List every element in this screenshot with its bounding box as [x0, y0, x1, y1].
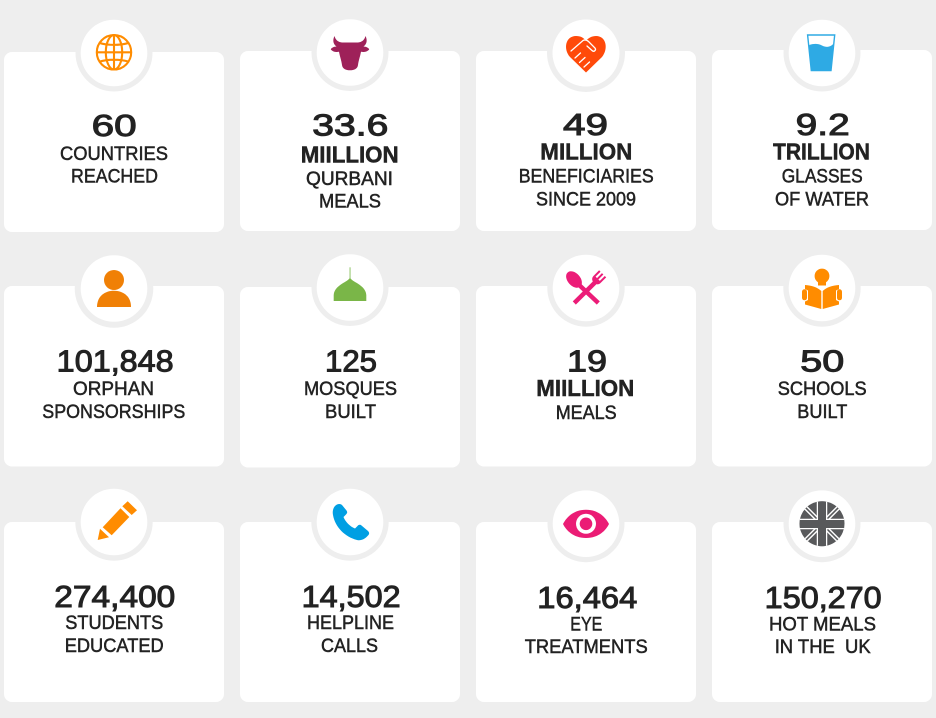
value: 50 [800, 345, 844, 379]
label [306, 168, 393, 212]
label [60, 143, 168, 188]
card background [476, 286, 696, 466]
value: 101,848 [57, 345, 174, 379]
icon badge [311, 483, 389, 561]
value: 14,502 [302, 580, 401, 614]
value: 33.6 [312, 108, 388, 142]
icon badge [547, 249, 625, 327]
label: BUILT [325, 401, 376, 423]
panel: 16,464 eye treatments [476, 485, 696, 702]
card background [712, 522, 932, 702]
label [525, 613, 648, 658]
label: REACHED [71, 166, 158, 188]
value: 60 [92, 109, 137, 143]
label: ORPHAN [73, 378, 154, 400]
unit: MILLION [540, 138, 632, 164]
label: IN THE UK [775, 636, 871, 658]
label: SINCE 2009 [536, 189, 636, 211]
icon badge [76, 14, 152, 92]
label: BUILT [797, 401, 847, 423]
panel: 19 million meals [476, 249, 696, 466]
icon badge [548, 485, 624, 562]
unit: MIILLION [301, 142, 399, 168]
label: SPONSORSHIPS [42, 401, 185, 423]
label [519, 166, 654, 211]
label [769, 613, 876, 658]
card background [712, 286, 932, 466]
panel: 33.6 million qurbani meals [240, 14, 460, 231]
label [775, 166, 869, 211]
label: MEALS [319, 190, 381, 212]
icon badge [783, 249, 861, 327]
label: BENEFICIARIES [519, 166, 654, 188]
label: STUDENTS [65, 612, 163, 634]
icon badge [784, 485, 860, 562]
label: HOT MEALS [769, 613, 876, 635]
value: 19 [567, 345, 607, 379]
panel: 49 million beneficiaries [476, 14, 696, 231]
icon badge [75, 249, 153, 328]
value: 9.2 [796, 108, 850, 142]
label: CALLS [321, 635, 378, 657]
icon: mosque dome [334, 267, 366, 301]
label: TREATMENTS [525, 636, 648, 658]
label [42, 378, 185, 423]
icon badge [784, 14, 860, 92]
card background [240, 287, 460, 468]
label [307, 612, 394, 657]
label: GLASSES [782, 166, 863, 188]
card background [240, 51, 460, 231]
card background [476, 522, 696, 702]
icon: reader with book [802, 269, 842, 309]
panel: 101,848 orphan sponsorships [4, 249, 224, 466]
label: MEALS [556, 402, 617, 424]
label: SCHOOLS [778, 378, 867, 400]
label [304, 378, 397, 423]
icon: person [97, 270, 131, 307]
label [65, 612, 164, 657]
value: 150,270 [765, 581, 882, 615]
icon badge [312, 14, 388, 91]
icon badge [75, 483, 153, 561]
panel: 125 mosques built [240, 249, 460, 468]
card background [4, 52, 224, 232]
label: QURBANI [306, 168, 393, 190]
panel: 50 schools built [712, 249, 932, 466]
panel: 274,400 students educated [4, 483, 224, 702]
label: EDUCATED [65, 635, 164, 657]
card background [476, 51, 696, 231]
card background [712, 50, 932, 230]
label [778, 378, 867, 423]
panel: 60 countries reached [4, 14, 224, 232]
value: 49 [563, 108, 608, 142]
value: 125 [325, 345, 377, 379]
value: 16,464 [537, 581, 637, 615]
label: COUNTRIES [60, 143, 168, 165]
label: HELPLINE [307, 612, 394, 634]
card background [4, 286, 224, 466]
icon: pencil [98, 501, 137, 540]
icon: globe [97, 35, 131, 70]
icon: glass of water [808, 35, 835, 71]
icon badge [312, 249, 388, 326]
label: MOSQUES [304, 378, 397, 400]
icon: UK flag [800, 501, 844, 546]
icon: heart handshake [566, 36, 606, 72]
unit: TRILLION [773, 138, 870, 164]
icon badge [547, 14, 625, 92]
icon: spoon and fork [563, 268, 606, 303]
label: EYE [570, 613, 602, 635]
panel: 14,502 helpline calls [240, 483, 460, 702]
label: OF WATER [775, 189, 869, 211]
panel: 9.2 trillion glasses of water [712, 14, 932, 230]
icon: telephone [333, 504, 369, 540]
icon: eye [563, 510, 609, 538]
unit: MIILLION [536, 375, 634, 401]
panel: 150,270 hot meals in the UK [712, 485, 932, 702]
card background [4, 522, 224, 702]
value: 274,400 [54, 580, 175, 614]
card background [240, 522, 460, 702]
icon: bull [331, 36, 369, 70]
